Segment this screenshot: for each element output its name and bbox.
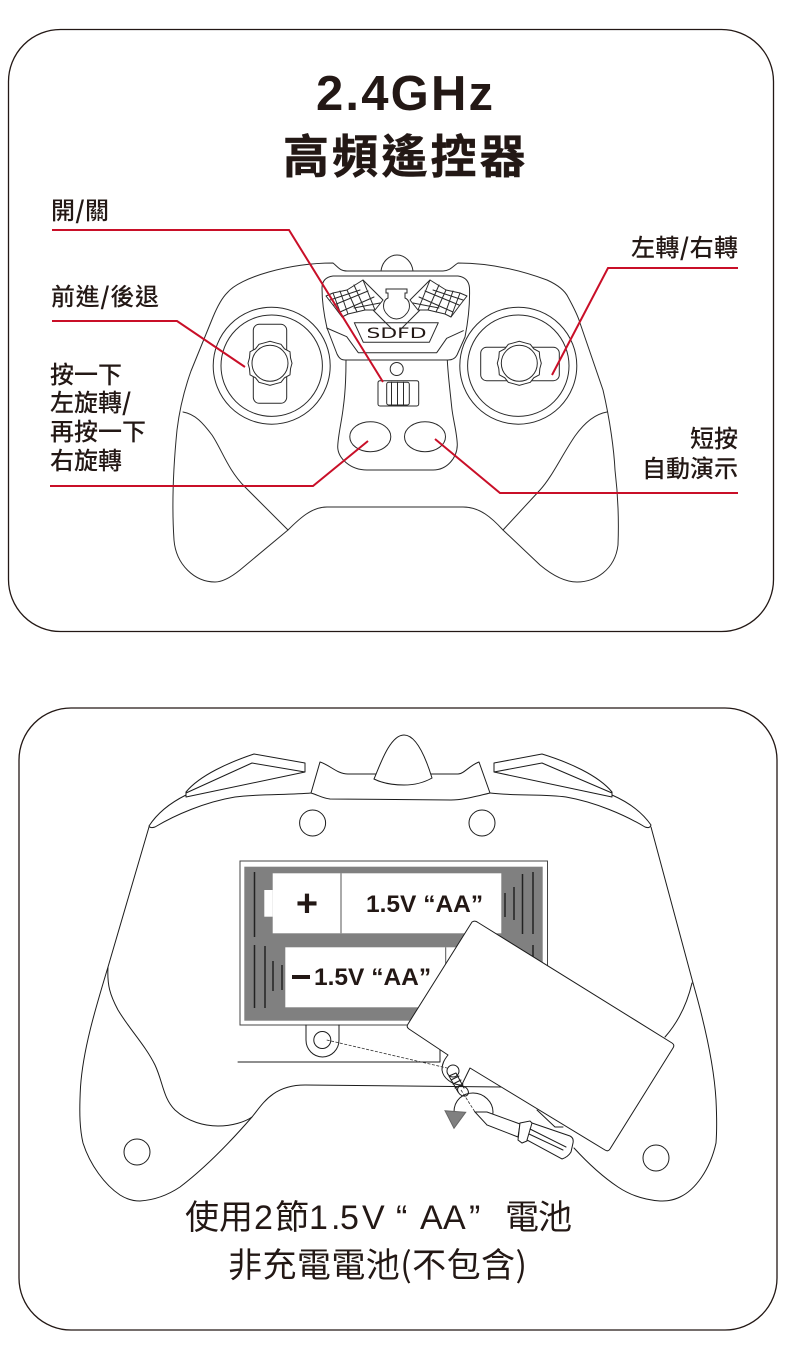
rotation arrow: [445, 1093, 493, 1128]
label: rotate button: 右旋轉: [50, 441, 122, 476]
label: power: 開/關: [51, 191, 109, 226]
right stick: [460, 307, 577, 424]
controller back body: [80, 827, 717, 1201]
label: auto demo: 自動演示: [642, 449, 738, 484]
label: auto demo: [435, 419, 738, 493]
screw holes: [124, 810, 669, 1171]
center panel: [338, 360, 457, 470]
battery cover: [407, 921, 674, 1151]
label: power: [51, 191, 383, 382]
logo plate: [322, 276, 470, 360]
right bumper: [494, 754, 612, 797]
battery 2: [285, 947, 505, 1007]
caption: [185, 1199, 572, 1287]
grip lines: [183, 412, 607, 530]
label: rotate button: [50, 355, 368, 486]
helmet: [384, 289, 409, 319]
right checkered flag: [401, 280, 467, 329]
title: 高頻遙控器: [283, 121, 526, 187]
illustration: controller back: [80, 735, 717, 1201]
illustration: controller front: [173, 255, 618, 582]
title: 2.4GHz: [316, 67, 493, 121]
battery 2: 1.5V “AA”: [314, 964, 431, 991]
label: auto demo: 短按: [690, 419, 738, 454]
logo plate: SDFD: [366, 326, 426, 342]
left bumper: [186, 754, 305, 797]
label: forward backward: 前進/後退: [51, 277, 159, 312]
buttons: [350, 422, 391, 452]
screw: [447, 1065, 470, 1098]
caption: 非充電電池(不包含): [228, 1238, 527, 1287]
label: forward backward: [51, 277, 245, 367]
controller body outline: [173, 263, 618, 582]
dashed guide: [327, 1040, 475, 1112]
panel: battery installation: [19, 708, 777, 1330]
top knob: [381, 255, 413, 271]
label: rotate button: 按一下: [50, 355, 122, 390]
battery compartment: [240, 861, 548, 1025]
screwdriver: [475, 1112, 573, 1159]
title: [283, 67, 526, 187]
left checkered flag: [326, 280, 392, 329]
power switch: [378, 381, 419, 406]
caption: 使用2節1.5V“AA”電池: [185, 1199, 572, 1237]
shoulder lines: [149, 793, 651, 828]
left stick: [213, 307, 330, 424]
LED: [390, 362, 403, 376]
label: rotate button: 再按一下: [50, 412, 146, 447]
grip lines: [108, 967, 692, 1126]
top plate: [311, 762, 490, 800]
antenna knob: [374, 735, 432, 785]
battery 1: 1.5V “AA”: [366, 891, 483, 918]
cover hinge lines: [537, 1110, 563, 1127]
battery 1: +: [296, 883, 318, 925]
label: turn left right: 左轉/右轉: [631, 228, 738, 263]
label: rotate button: 左旋轉/: [50, 383, 131, 418]
label: turn left right: [552, 228, 738, 375]
panel: remote controller front: [8, 30, 774, 632]
battery 1: [264, 873, 501, 933]
mounting tab: [306, 1025, 339, 1057]
